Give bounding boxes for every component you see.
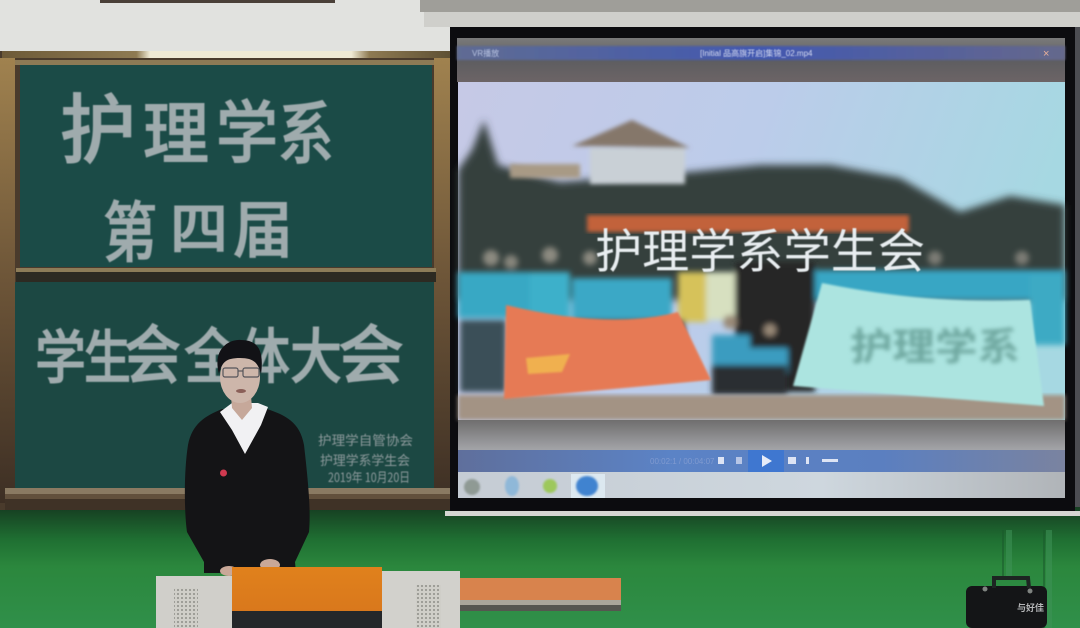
- chalk title line 3: 会: [124, 305, 181, 397]
- mouth: [236, 389, 246, 393]
- player control area: [458, 420, 1065, 472]
- side table: [460, 578, 621, 611]
- white banner: [793, 283, 1044, 406]
- ceiling rail above the screen: [100, 0, 1080, 27]
- chalk title line 3: 学: [35, 311, 86, 395]
- chalk title line 1: 系: [278, 79, 334, 178]
- player window top bar: [Initial 品高旗开启]集锦_02.mp4: [700, 48, 813, 58]
- screen white lower edge: [445, 511, 1080, 516]
- banner above crowd: [587, 215, 909, 232]
- podium orange top: [232, 567, 382, 612]
- screen frame: [450, 27, 1075, 511]
- building: [510, 120, 690, 184]
- chalk title line 3: 体: [240, 309, 290, 396]
- crowd in teal shirts: [458, 247, 1065, 395]
- speaker grilles: [174, 585, 441, 628]
- chalk title line 1: 学: [216, 78, 278, 177]
- chalk title line 3: 会: [338, 305, 404, 397]
- speaker on the right: 与好佳: [1017, 601, 1044, 614]
- green lower wall: [0, 505, 1080, 628]
- chalk signature: 2019年 10月20日: [328, 467, 410, 486]
- hair: [217, 340, 262, 374]
- player window top bar: VR播放: [472, 48, 499, 58]
- chalk title line 2: 届: [233, 180, 293, 270]
- play button icon: [762, 455, 772, 467]
- treeline: [458, 120, 1065, 300]
- player window top bar: ×: [1043, 48, 1049, 60]
- podium right panel: [381, 571, 460, 628]
- chalk title line 2: [103, 180, 293, 276]
- podium dark front: [232, 611, 382, 628]
- face: [220, 351, 260, 403]
- desktop taskbar: [458, 472, 1065, 498]
- chalk title line 3: [35, 305, 404, 397]
- podium left panel: [156, 576, 232, 628]
- blackboard: [0, 51, 450, 510]
- lower board panel: [15, 282, 434, 488]
- divider rail: [16, 268, 436, 272]
- speaker on the right: [966, 578, 1047, 628]
- sweater: [185, 409, 310, 573]
- video frame photo: [458, 82, 1065, 420]
- chalk signature: 护理学自管协会: [318, 430, 413, 449]
- video caption: 护理学系学生会: [595, 213, 925, 282]
- chalk title line 2: 第: [103, 180, 157, 276]
- student speaker: [185, 340, 310, 576]
- divider shadow: [16, 272, 436, 282]
- chalk title line 1: [60, 69, 334, 179]
- upper board panel: [20, 65, 432, 267]
- chalk title line 1: 护: [60, 69, 136, 179]
- chalk title line 2: 四: [170, 185, 228, 266]
- podium: [156, 567, 460, 628]
- chalk signature: [318, 430, 413, 486]
- neck: [231, 396, 252, 420]
- video frame photo: 护理学系: [850, 316, 1020, 371]
- chalk title line 3: 生: [84, 311, 131, 395]
- chalk title line 3: 全: [184, 309, 241, 396]
- chalk signature: 护理学系学生会: [320, 450, 410, 469]
- right wall edge: [1075, 27, 1080, 507]
- wall-mounted trims on right: [1002, 530, 1052, 628]
- player control area: 00:02:1 / 00:04:07: [650, 457, 715, 466]
- badge: [220, 470, 227, 476]
- board frame: [0, 51, 450, 510]
- orange banner: [504, 305, 711, 399]
- shirt collar: [220, 403, 268, 454]
- chalk title line 1: 理: [143, 79, 209, 178]
- hands: [220, 566, 238, 576]
- chalk title line 3: 大: [290, 309, 342, 396]
- player window top bar: [457, 38, 1065, 82]
- projection screen: [445, 27, 1080, 516]
- ground: [458, 395, 1065, 420]
- glasses: [223, 368, 259, 377]
